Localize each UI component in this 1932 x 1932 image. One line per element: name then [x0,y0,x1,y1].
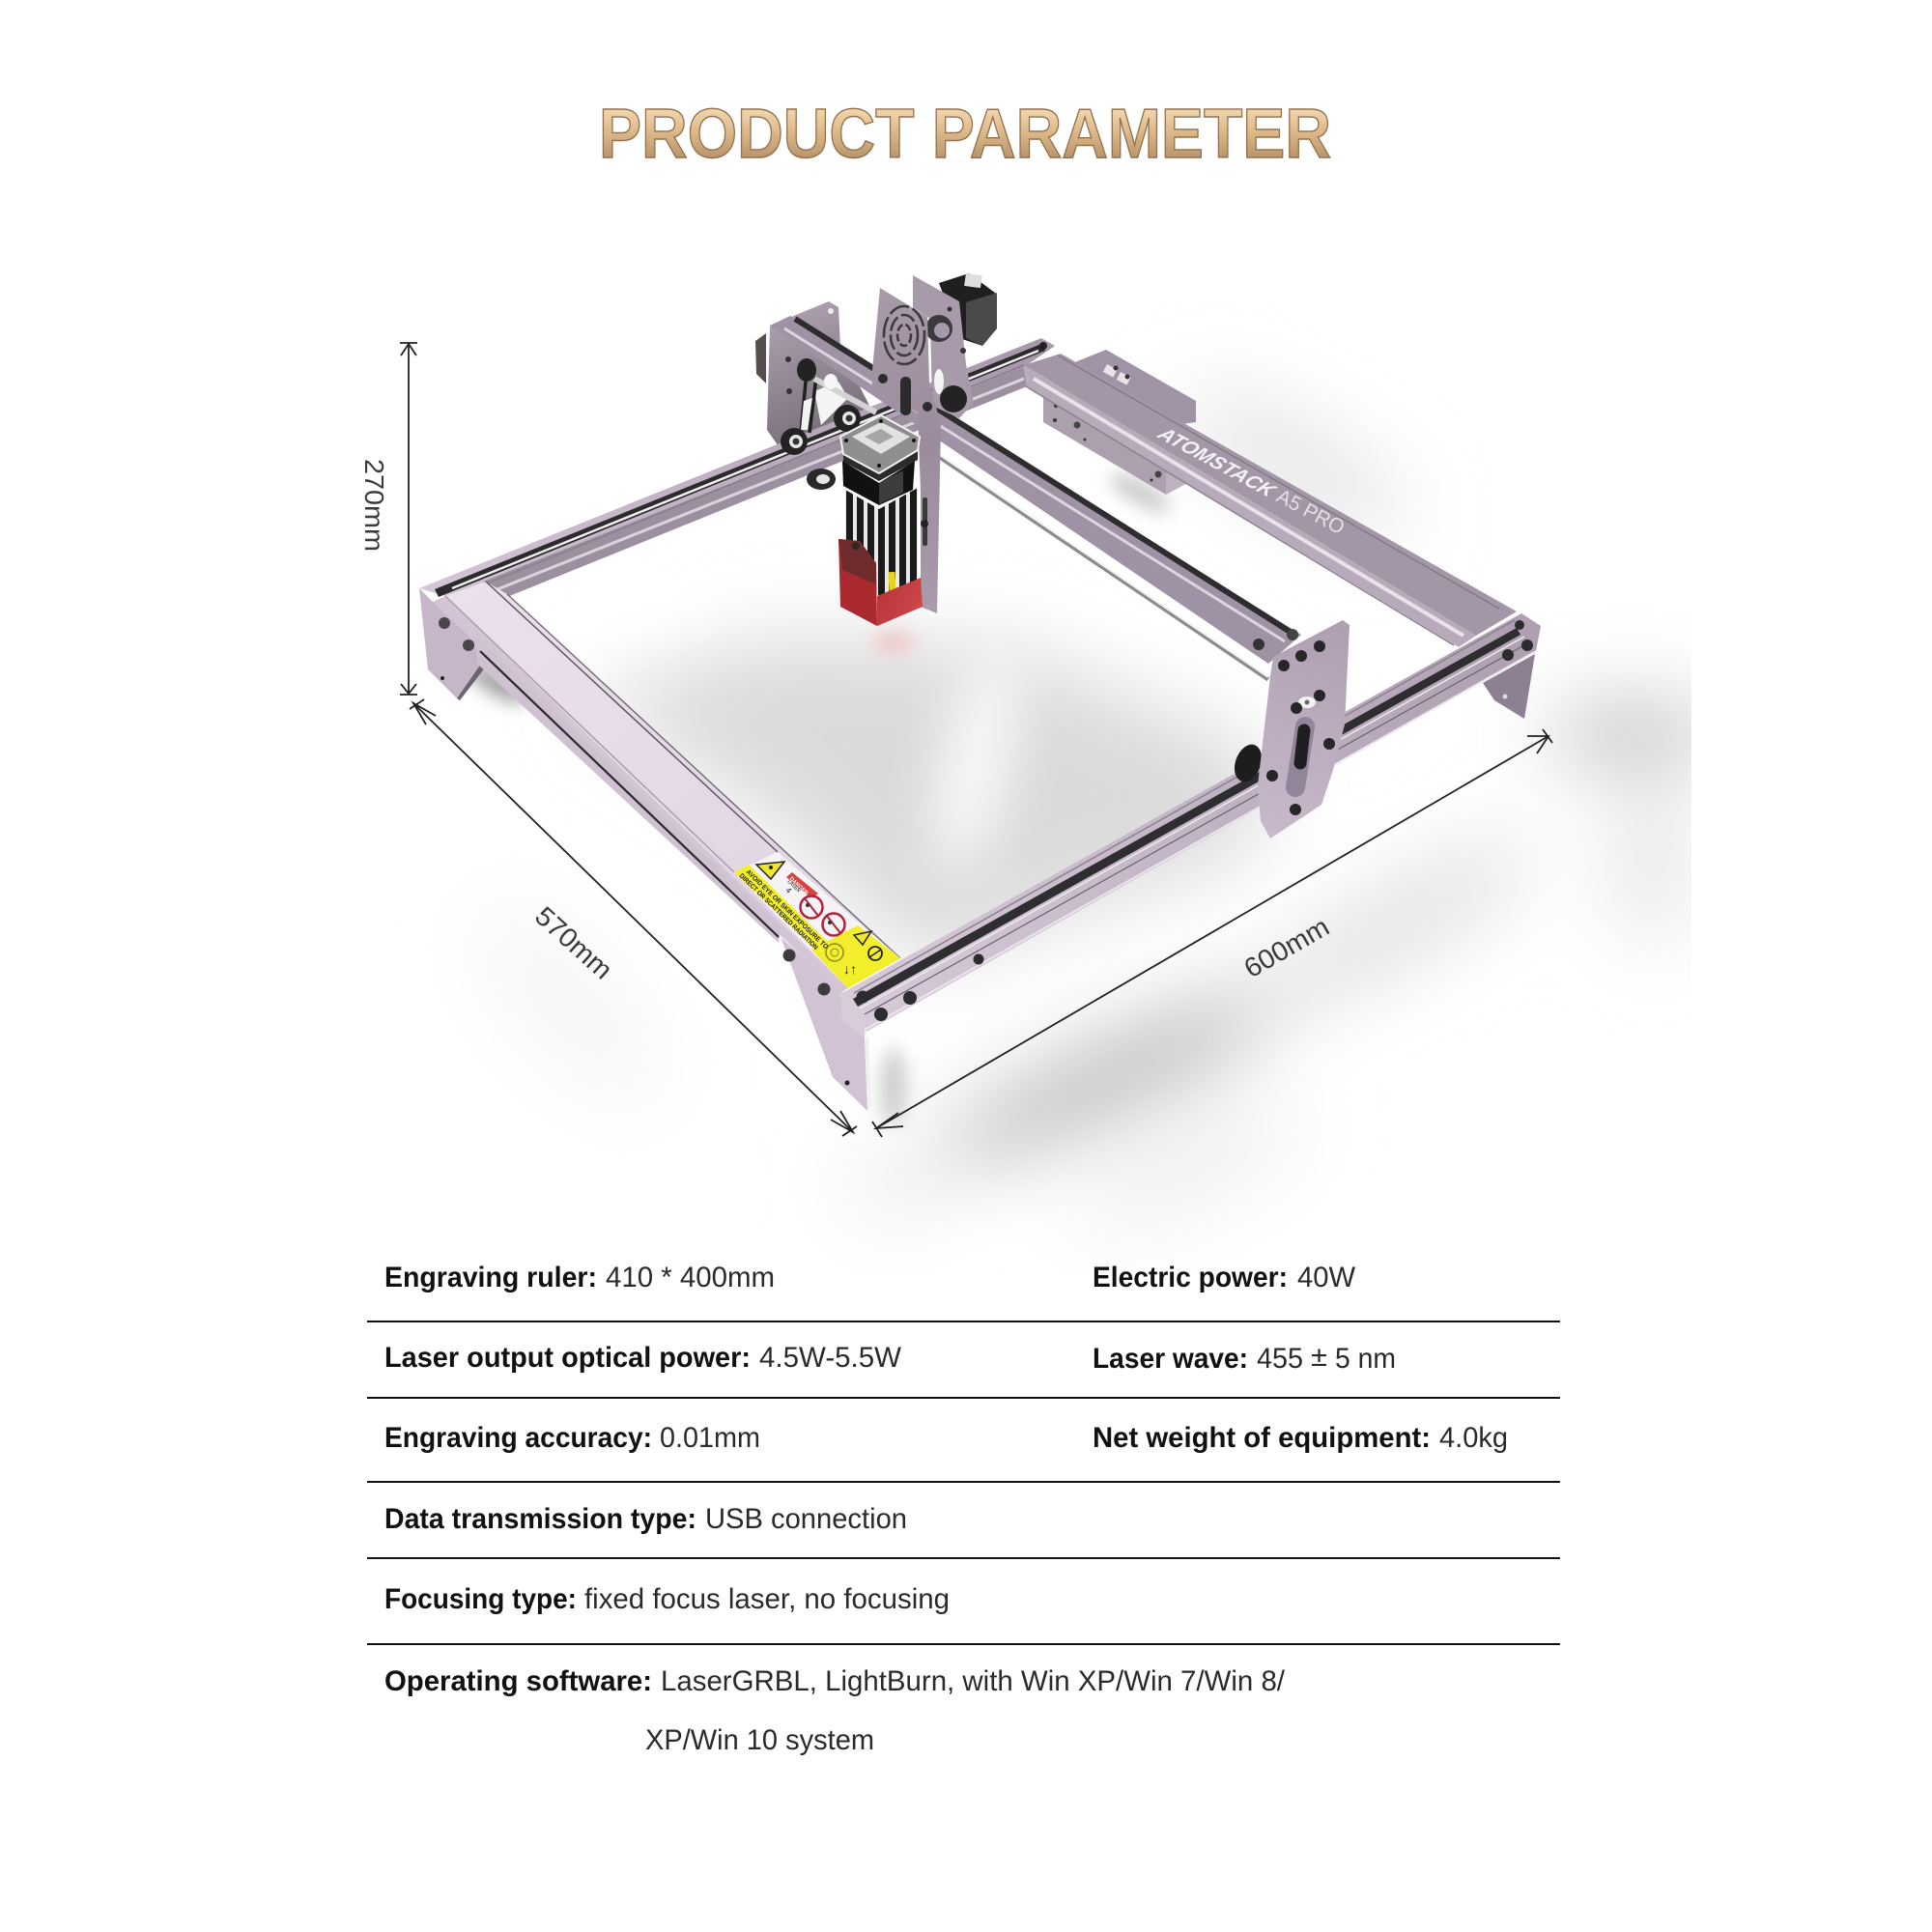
laser warning sticker: 4 [784,886,793,895]
dimension 570mm [410,699,857,1136]
laser engraver machine [419,273,1541,1111]
row: laser output and laser wave: 4.5W-5.5W [759,1342,902,1374]
row: operating software: LaserGRBL, LightBurn, with Win XP/Win 7/Win 8/ [661,1665,1286,1697]
row: engraving ruler and electric power: 410 * 400mm [606,1262,775,1293]
laser warning sticker: AVOID EYE OR SKIN EXPOSURE TO [745,868,830,952]
left rail [419,338,1055,597]
left gantry plate [755,301,874,454]
row: data transmission: Data transmission type: [384,1503,696,1535]
row: data transmission: USB connection [705,1503,907,1535]
right leg [1483,654,1535,719]
laser warning sticker: DIRECT OR SCATTERED RADIATION [738,872,819,952]
specification table [367,1262,1560,1756]
row: engraving accuracy and net weight: 4.0kg [1439,1422,1508,1454]
row: engraving ruler and electric power: Engraving ruler: [384,1262,597,1293]
left leg [419,588,486,700]
row: engraving ruler and electric power [384,1262,1356,1293]
row: engraving accuracy and net weight: Engraving accuracy: [384,1422,652,1454]
dimension 600mm: 600mm [1238,911,1334,983]
laser warning sticker: ↓↑ [843,961,857,977]
laser warning sticker [734,852,900,988]
dimension 270mm: 270mm [359,459,389,552]
row: engraving ruler and electric power: 40W [1297,1262,1356,1293]
fan plate [872,288,941,613]
centre beam [770,316,1301,679]
laser warning sticker: DANGER [788,876,809,897]
controller box [1043,350,1196,495]
right rail with brand: A5 PRO [1273,485,1349,539]
ground shadows [469,386,1691,1208]
near leg [781,937,871,1111]
row: focusing type: Focusing type: [384,1583,577,1615]
row: engraving ruler and electric power: Electric power: [1093,1262,1288,1293]
belt and rollers [781,358,876,490]
dimension 570mm: 570mm [529,900,618,985]
row: laser output and laser wave [384,1341,1396,1375]
row: laser output and laser wave: 455 [1257,1343,1303,1375]
dimension 600mm [872,729,1552,1137]
laser warning sticker: LASER [786,879,802,895]
row: laser output and laser wave: Laser wave: [1093,1343,1248,1375]
row: focusing type: fixed focus laser, no focusing [584,1583,950,1615]
rear motor plate with roller [913,275,974,418]
front panel bar [433,582,900,993]
laser module [838,415,923,626]
right rail with brand [1024,354,1517,647]
row: engraving accuracy and net weight [384,1422,1508,1454]
title: PRODUCT PARAMETER [599,96,1331,173]
row: laser output and laser wave: Laser output optical power: [384,1342,751,1374]
rear stepper motor [939,273,997,346]
row: focusing type [384,1583,950,1615]
row: laser output and laser wave: 5 nm [1335,1343,1396,1375]
row: engraving accuracy and net weight: Net weight of equipment: [1093,1422,1431,1454]
row: data transmission [384,1503,907,1535]
dimension 270mm [359,343,417,695]
row: engraving accuracy and net weight: 0.01mm [660,1422,760,1454]
row: operating software: XP/Win 10 system [645,1724,874,1756]
row: operating software: Operating software: [384,1665,652,1697]
right carriage plate [1230,620,1350,838]
right rail with brand: ATOMSTACK [1152,424,1281,501]
row: laser output and laser wave: ± [1311,1341,1327,1373]
front rail [838,613,1541,1038]
row: operating software [384,1665,1286,1756]
